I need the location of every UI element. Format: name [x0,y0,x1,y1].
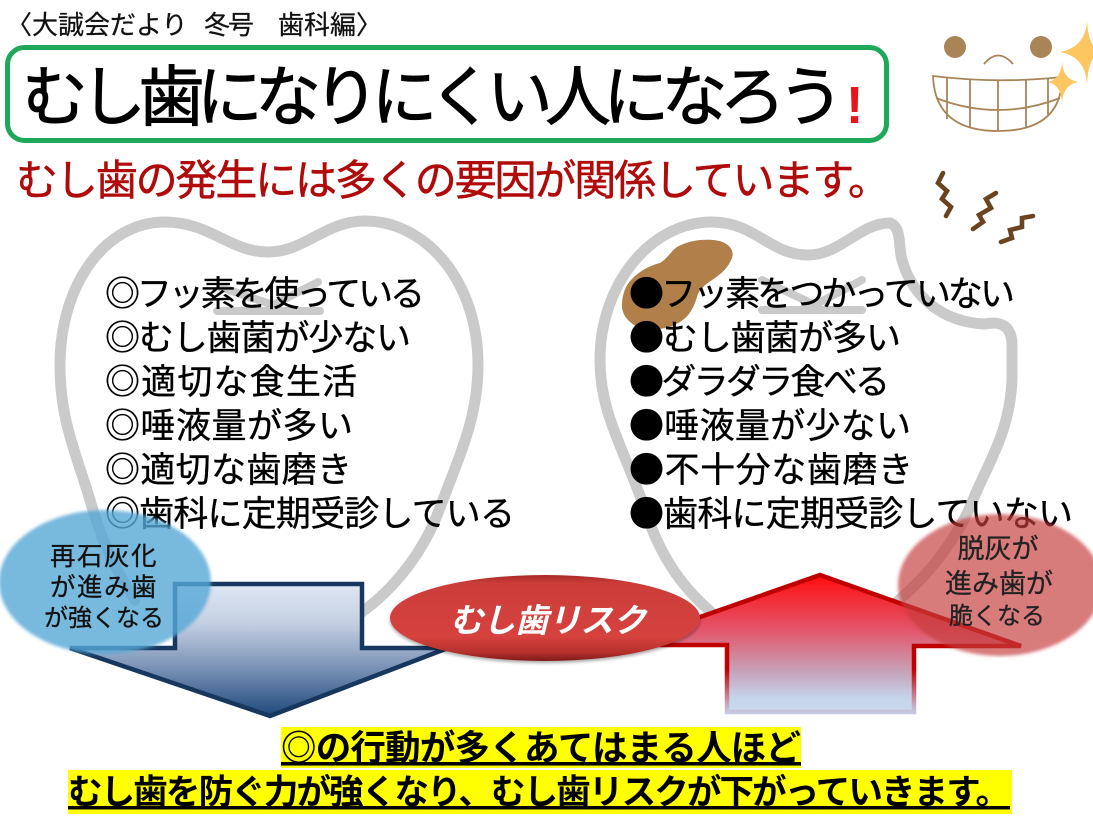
conclusion: むし歯を防ぐ力が強くなり、むし歯リスクが下がっていきます。 [68,773,1010,812]
decay stain [622,240,733,329]
list: risky habits: ●不十分な歯磨き [629,442,913,493]
list: risky habits: ●歯科に定期受診していない [629,486,1073,537]
arrow: risk down [70,584,448,716]
list: good habits [105,275,515,534]
icon: pain marks [938,173,1033,242]
list: good habits: ◎唾液量が多い [105,407,353,446]
list: good habits: ◎適切な食生活 [105,363,357,402]
list: risky habits: ●むし歯菌が多い [629,310,901,361]
list: risky habits: ●フッ素をつかっていない [629,266,1015,317]
list: good habits: ◎むし歯菌が少ない [105,319,411,358]
conclusion: ◎の行動が多くあてはまる人ほど [281,728,801,768]
callout: demineralisation [898,514,1093,656]
list: risky habits [629,266,1073,537]
callout: remineralisation [0,510,211,654]
callout: demineralisation: 進み歯が [945,569,1053,599]
header label: 歯科編〉 [278,10,382,40]
list: good habits: ◎フッ素を使っている [105,275,425,314]
header label: 冬号 [204,10,254,40]
label: caries risk [390,575,700,661]
list: risky habits: ●唾液量が少ない [629,398,911,449]
header label [6,10,382,40]
header label: 〈大誠会だより [6,10,187,40]
title box: むし歯になりにくい人になろう [22,60,844,134]
conclusion [68,727,1012,814]
list: risky habits: ●ダラダラ食べる [629,354,890,405]
tooth: healthy [60,221,478,617]
callout: remineralisation: 再石灰化 [50,543,158,571]
icon: smiling face with sparkles [933,20,1093,131]
callout: demineralisation: 脱灰が [958,534,1038,564]
label: caries risk: むし歯リスク [450,602,648,639]
subheading: むし歯の発生には多くの要因が関係しています。 [16,157,890,204]
list: good habits: ◎歯科に定期受診している [105,495,515,534]
callout: remineralisation: が強くなる [44,605,164,632]
callout: remineralisation: が進み歯 [50,574,158,602]
arrow: risk up [620,575,1021,712]
tooth: decayed [600,222,1012,611]
callout: demineralisation: 脆くなる [949,603,1045,630]
list: good habits: ◎適切な歯磨き [105,451,352,490]
title box: ! [846,77,863,135]
